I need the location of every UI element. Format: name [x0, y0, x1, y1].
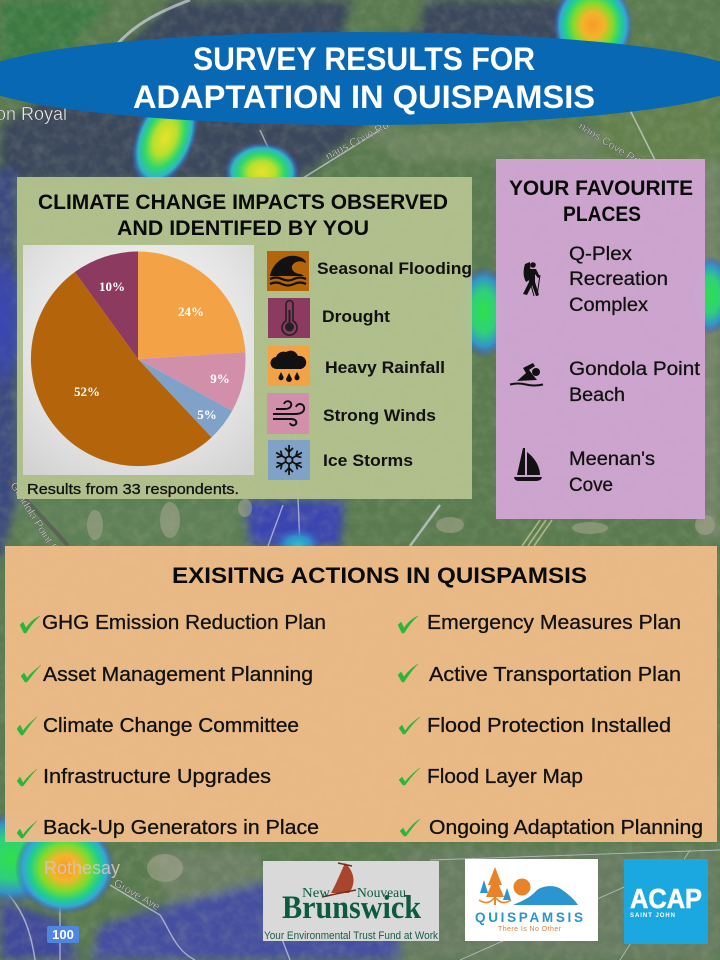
pie chart	[23, 245, 254, 475]
panel heading: YOUR FAVOURITE	[509, 177, 693, 200]
legend: seasonal flooding	[267, 251, 472, 291]
action list: left column: Back-Up Generators in Place	[43, 816, 319, 839]
place: Meenan's Cove: Cove	[569, 474, 613, 496]
title banner	[0, 32, 720, 125]
panel heading	[509, 177, 693, 226]
place: Gondola Point Beach: Beach	[569, 384, 625, 406]
place: Q-Plex: Q-Plex	[569, 243, 632, 265]
action list: right column: Ongoing Adaptation Planning	[429, 816, 703, 839]
logo: New Brunswick Environmental Trust Fund: Brunswick	[282, 890, 422, 926]
place: Meenan's Cove	[569, 448, 655, 496]
action list: left column: GHG Emission Reduction Plan	[42, 611, 326, 634]
place: Q-Plex: Recreation	[569, 268, 668, 290]
legend: heavy rainfall: Heavy Rainfall	[325, 358, 445, 377]
pie chart: 9%	[210, 371, 230, 386]
background: satellite map with heat overlay: Grove Ave	[112, 877, 162, 913]
legend: ice storms: Ice Storms	[323, 451, 413, 470]
respondents note: Results from 33 respondents.	[27, 481, 239, 498]
panel: existing actions	[5, 546, 717, 842]
action list: left column	[17, 611, 326, 839]
icon: sailboat	[514, 448, 542, 481]
place: Q-Plex: Complex	[569, 294, 648, 316]
pie chart: 52%	[74, 384, 100, 399]
pie chart: 5%	[197, 407, 217, 422]
logo: Quispamsis: QUISPAMSIS	[475, 910, 583, 925]
title banner: SURVEY RESULTS FOR	[193, 41, 535, 77]
logo: New Brunswick Environmental Trust Fund: Your Environmental Trust Fund at Work	[264, 930, 438, 942]
logo: ACAP Saint John: SAINT JOHN	[630, 913, 675, 919]
panel heading: CLIMATE CHANGE IMPACTS OBSERVED	[38, 191, 448, 214]
background: satellite map with heat overlay: 100	[52, 927, 74, 942]
panel heading	[38, 191, 448, 240]
background: satellite map with heat overlay: nans Cove Rd	[576, 120, 642, 167]
panel heading: AND IDENTIFED BY YOU	[117, 217, 369, 240]
logo: New Brunswick Environmental Trust Fund: Nouveau	[357, 886, 406, 901]
logo: ACAP Saint John: ACAP	[630, 883, 702, 914]
legend: heavy rainfall	[268, 346, 445, 386]
legend: ice storms	[268, 440, 413, 480]
pie chart: 10%	[99, 279, 125, 294]
panel heading: PLACES	[563, 203, 641, 226]
action list: left column: Climate Change Committee	[43, 714, 299, 737]
background: satellite map with heat overlay: Rothesay	[44, 858, 120, 878]
panel: climate change impacts	[17, 177, 472, 499]
panel heading: EXISITNG ACTIONS IN QUISPAMSIS	[172, 563, 587, 588]
background: satellite map with heat overlay: nans Cove Rd	[324, 119, 391, 163]
place: Gondola Point Beach	[569, 358, 701, 406]
legend: strong winds: Strong Winds	[323, 406, 436, 425]
action list: right column: Flood Layer Map	[427, 765, 583, 788]
panel: favourite places	[496, 159, 705, 519]
action list: right column: Flood Protection Installed	[427, 714, 671, 737]
place: Meenan's Cove: Meenan's	[569, 448, 655, 470]
action list: left column: Infrastructure Upgrades	[43, 765, 271, 788]
title banner: ADAPTATION IN QUISPAMSIS	[133, 79, 595, 115]
place: Gondola Point Beach: Gondola Point	[569, 358, 701, 380]
action list: right column	[398, 611, 703, 839]
legend: seasonal flooding: Seasonal Flooding	[317, 259, 472, 278]
icon: swimmer	[510, 363, 543, 386]
logo: Quispamsis: There Is No Other	[498, 926, 562, 933]
logo: ACAP Saint John	[624, 859, 708, 944]
logo: Quispamsis	[465, 859, 598, 941]
legend: drought	[268, 298, 390, 338]
background: satellite map with heat overlay: Gondola Point Rd	[7, 480, 64, 560]
action list: left column: Asset Management Planning	[43, 663, 313, 686]
pie chart: 24%	[178, 304, 204, 319]
action list: right column: Active Transportation Plan	[429, 663, 681, 686]
action list: right column: Emergency Measures Plan	[427, 611, 681, 634]
place: Q-Plex	[569, 243, 668, 316]
logo: New Brunswick Environmental Trust Fund	[263, 861, 439, 942]
logo: New Brunswick Environmental Trust Fund: New	[302, 886, 331, 901]
legend: strong winds	[267, 393, 436, 434]
icon: hiker	[523, 262, 540, 296]
legend: drought: Drought	[322, 307, 390, 326]
